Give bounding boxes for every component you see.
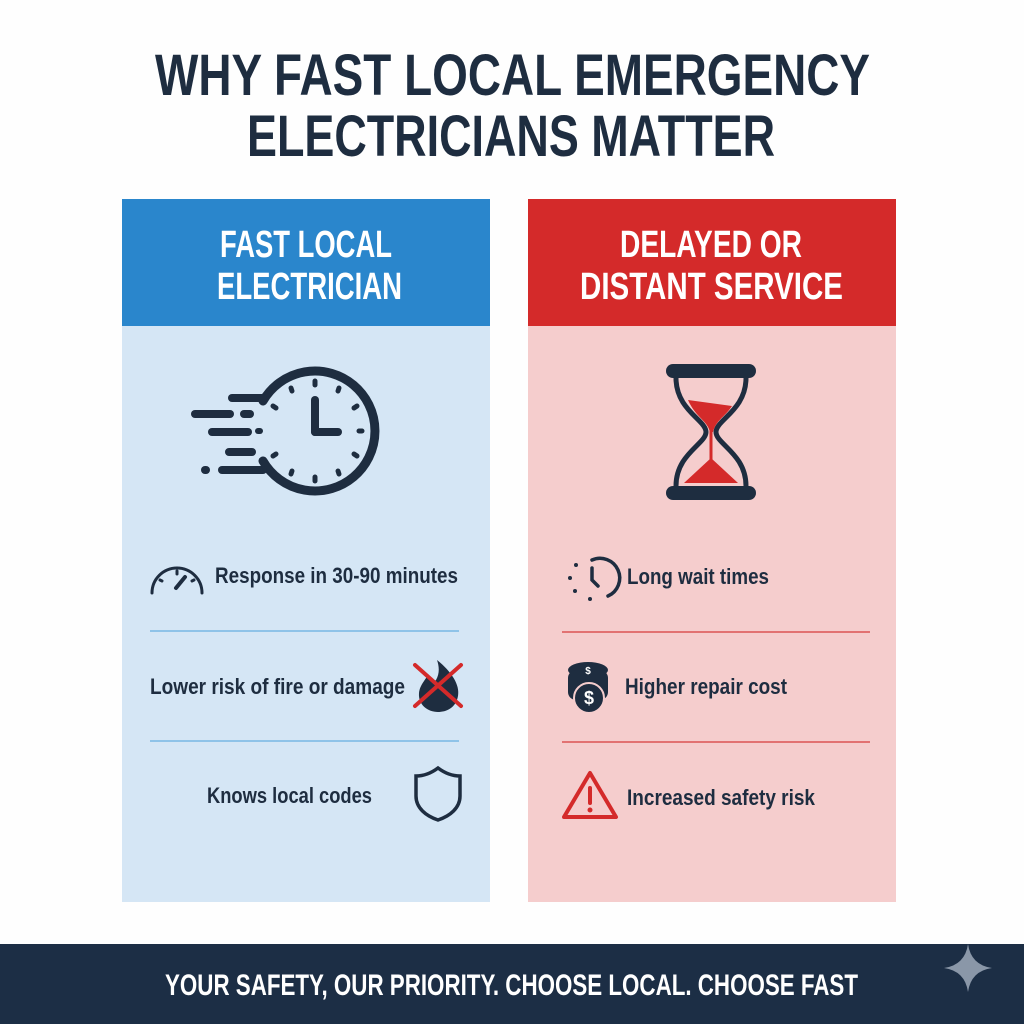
title: [155, 43, 870, 169]
item: repair cost: $: [584, 688, 594, 708]
header: delayed or distant service: DISTANT SERVICE: [580, 266, 843, 308]
icon: sparkle: [944, 944, 992, 992]
header: fast local electrician: [122, 199, 490, 326]
item: repair cost: Higher repair cost: [625, 674, 788, 699]
item: safety risk: Increased safety risk: [627, 785, 816, 810]
item: lower risk: [150, 660, 461, 712]
item: local codes: [207, 768, 460, 820]
panel: fast local electrician: [122, 199, 490, 902]
item: response time: Response in 30-90 minutes: [215, 563, 458, 588]
footer banner: [0, 944, 1024, 1024]
header: delayed or distant service: [528, 199, 896, 326]
item: long wait: Long wait times: [627, 564, 769, 589]
item: safety risk: [564, 773, 816, 817]
title: ELECTRICIANS MATTER: [247, 104, 775, 169]
icon: fast clock: [195, 371, 375, 491]
item: response time: [152, 563, 458, 593]
header: fast local electrician: ELECTRICIAN: [217, 266, 402, 308]
item: repair cost: $: [585, 666, 591, 677]
panel: delayed or distant service: [528, 199, 896, 902]
header: fast local electrician: FAST LOCAL: [220, 224, 392, 266]
item: lower risk: Lower risk of fire or damage: [150, 674, 405, 699]
icon: hourglass: [666, 364, 756, 500]
item: long wait: [570, 558, 769, 599]
item: repair cost: [568, 662, 788, 713]
item: local codes: Knows local codes: [207, 783, 372, 808]
header: delayed or distant service: DELAYED OR: [620, 224, 802, 266]
